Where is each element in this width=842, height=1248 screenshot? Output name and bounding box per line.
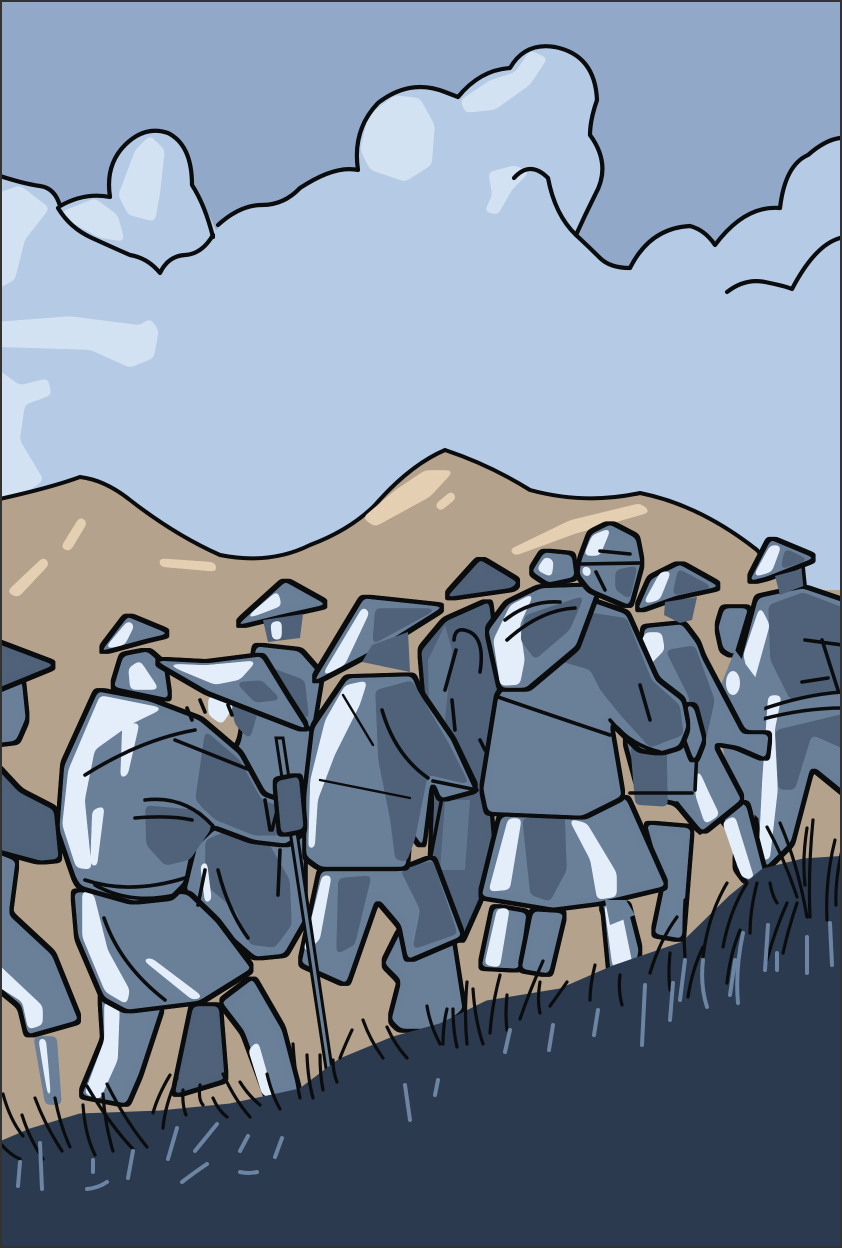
traveller: small hat far left	[95, 615, 173, 700]
grass blades	[0, 820, 842, 1159]
staff	[276, 738, 333, 1075]
helmet head	[578, 523, 642, 607]
mountain highlights	[6, 470, 652, 598]
traveller: torso between figures	[715, 650, 765, 820]
traveller: central figure with pack	[480, 523, 688, 990]
legs	[480, 906, 528, 970]
hand	[275, 775, 305, 835]
traveller: behind central figure	[420, 558, 520, 945]
traveller: walking, light trousers	[625, 563, 770, 940]
face	[228, 695, 260, 740]
hat	[310, 597, 447, 685]
grass highlights	[18, 923, 832, 1189]
small head	[530, 551, 576, 584]
traveller: main foreground figure with staff	[58, 655, 333, 1105]
flat hat	[150, 655, 310, 732]
torso	[58, 690, 305, 902]
traveller: hat behind main figure	[185, 580, 330, 958]
cloud highlights	[0, 50, 548, 505]
rear leg	[173, 1005, 226, 1096]
grass ground	[0, 820, 842, 1248]
traveller: left edge	[0, 640, 80, 1105]
traveller: far right	[740, 538, 842, 870]
cloud outlines	[0, 46, 840, 292]
torso	[482, 600, 688, 817]
skirt	[73, 891, 253, 1011]
cloud bank	[0, 46, 842, 640]
far rear leg	[383, 920, 464, 1030]
pack	[487, 585, 600, 689]
traveller: large conical hat	[300, 597, 477, 1030]
traveller: small head behind	[717, 607, 750, 657]
legs	[300, 857, 463, 985]
trousers	[480, 797, 667, 909]
front legs	[80, 994, 163, 1105]
mountains	[0, 450, 842, 1248]
torso	[305, 675, 477, 868]
